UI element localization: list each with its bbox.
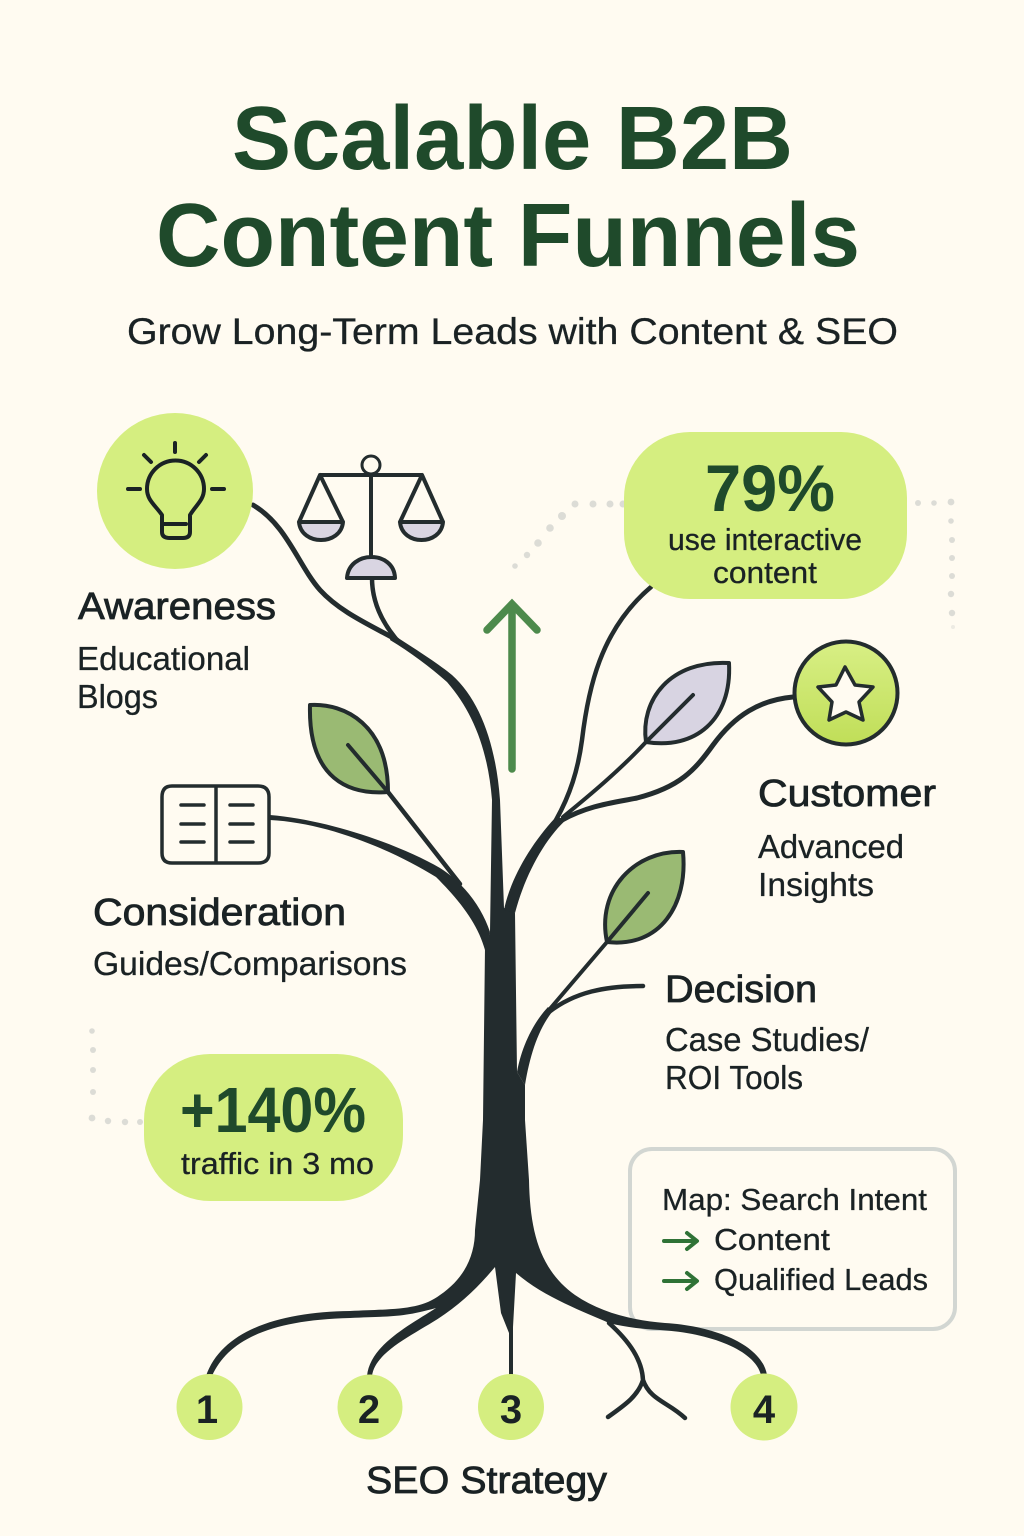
node 4	[730, 1374, 798, 1440]
branch: balance scale	[372, 578, 397, 640]
branch: decision	[549, 986, 643, 1012]
subtitle: Grow Long-Term Leads with Content & SEO	[127, 311, 898, 352]
branch: customer	[562, 697, 793, 820]
customer icon: star badge	[794, 642, 898, 744]
callout: search intent map: Map: Search Intent	[662, 1182, 927, 1217]
label: customer: Advanced	[758, 828, 904, 865]
node 1	[176, 1374, 242, 1440]
trunk and roots	[206, 634, 767, 1376]
branch: 79 percent	[556, 587, 651, 820]
label: awareness	[77, 586, 276, 715]
label: decision	[665, 969, 870, 1096]
tree: trunk, branches and roots	[206, 505, 793, 1418]
label: customer: Insights	[758, 866, 874, 903]
label: consideration: Consideration	[93, 892, 346, 934]
stat: 79% interactive content	[624, 432, 907, 599]
callout: search intent map: Content	[714, 1222, 830, 1257]
node 2	[338, 1374, 402, 1440]
label: decision: ROI Tools	[665, 1059, 803, 1096]
stat: 79% interactive content: content	[713, 555, 817, 590]
label: SEO strategy: SEO Strategy	[366, 1460, 607, 1502]
node 3: 3	[500, 1388, 522, 1432]
dotted trail: upper left of 79% stat	[512, 500, 626, 569]
stat: 79% interactive content: 79%	[705, 451, 835, 525]
label: decision: Case Studies/	[665, 1021, 870, 1058]
label: consideration	[93, 892, 407, 982]
branch: lavender leaf stem	[563, 742, 646, 817]
arrow: growth	[487, 604, 537, 769]
title: Scalable B2B	[232, 89, 793, 189]
stat: 79% interactive content: use interactive	[668, 522, 862, 557]
title	[156, 89, 860, 286]
branch: right lower trunk	[517, 1007, 552, 1085]
title: Content Funnels	[156, 186, 860, 286]
branch: left leaf stem	[388, 792, 460, 884]
callout: search intent map: Qualified Leads	[714, 1262, 928, 1297]
icon: balance scale	[299, 456, 443, 578]
awareness icon: lightbulb	[97, 413, 253, 569]
branch: awareness	[253, 505, 397, 640]
label: awareness: Educational	[77, 640, 250, 677]
stat: +140% traffic: +140%	[180, 1074, 366, 1146]
label: customer	[758, 773, 936, 903]
label: consideration: Guides/Comparisons	[93, 945, 407, 982]
callout: search intent map	[630, 1149, 955, 1329]
icon: green leaf right	[605, 852, 684, 943]
label: awareness: Blogs	[77, 678, 158, 715]
label: decision: Decision	[665, 969, 817, 1011]
branch: right upper trunk	[504, 818, 568, 913]
dotted trail: left of +140% stat	[89, 1028, 143, 1125]
node 1: 1	[196, 1388, 218, 1432]
root fork	[608, 1323, 685, 1418]
stat: +140% traffic: traffic in 3 mo	[181, 1146, 374, 1181]
node 4: 4	[753, 1388, 776, 1432]
label: customer: Customer	[758, 773, 936, 815]
icon: arrow to qualified leads	[664, 1273, 697, 1289]
icon: open book	[162, 786, 269, 863]
node 2: 2	[358, 1388, 380, 1432]
dotted trail: right of 79% stat	[915, 499, 955, 629]
icon: green leaf left	[310, 705, 388, 792]
branch: right leaf stem	[549, 942, 607, 1010]
icon: lavender leaf	[645, 663, 729, 743]
node 3	[478, 1374, 544, 1440]
label: awareness: Awareness	[78, 586, 276, 628]
branch: consideration	[270, 815, 490, 950]
stat: +140% traffic	[144, 1054, 403, 1201]
icon: arrow to content	[664, 1233, 697, 1249]
